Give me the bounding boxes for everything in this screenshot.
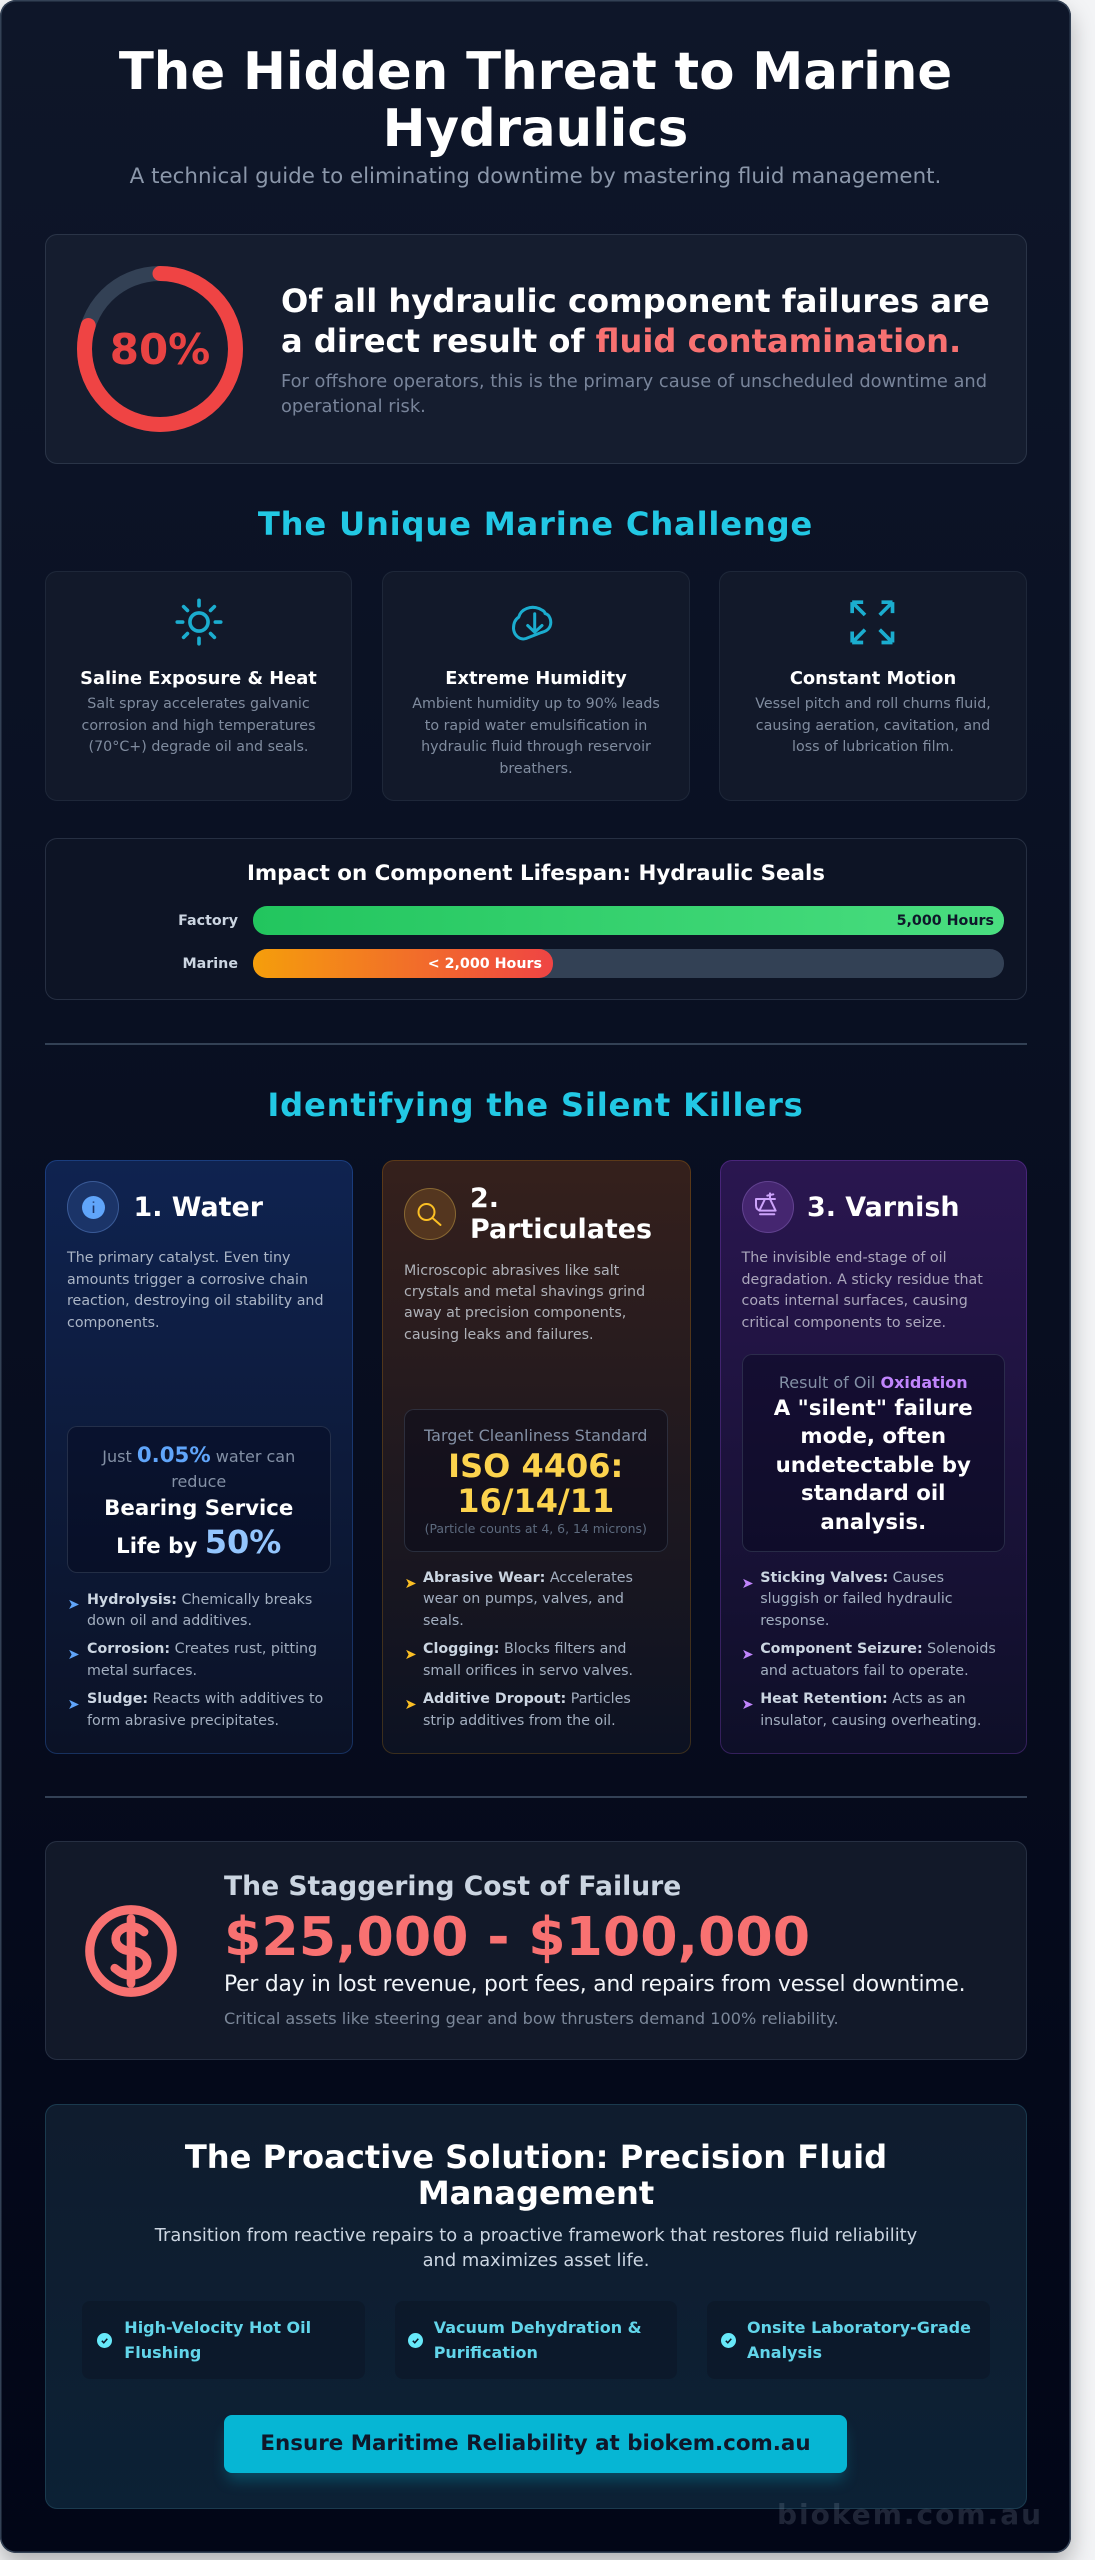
marine bar row	[182, 949, 1004, 978]
call to action button: Ensure Maritime Reliability at biokem.com.au	[260, 2431, 811, 2456]
icon: information circle	[67, 1181, 119, 1233]
callout value: 16/14/11	[457, 1482, 614, 1520]
solution heading: The Proactive Solution: Precision Fluid	[185, 2138, 887, 2176]
card text: (70°C+) degrade oil and seals.	[89, 739, 308, 755]
item: hydrolysis: Hydrolysis: Chemically breaks	[87, 1592, 312, 1608]
icon: dollar circle	[85, 1905, 177, 1997]
callout statement: undetectable by	[776, 1453, 971, 1478]
card text: The invisible end-stage of oil	[742, 1250, 947, 1266]
card text: Microscopic abrasives like salt	[404, 1263, 619, 1279]
card text: away at precision components,	[404, 1305, 626, 1321]
panel: proactive solution	[45, 2104, 1027, 2509]
arrow: ➤	[404, 1696, 417, 1712]
card text: breathers.	[499, 761, 573, 777]
statistic headline	[281, 282, 990, 360]
callout lead-in continued: reduce	[171, 1472, 226, 1490]
item: heat retention: Heat Retention: Acts as an	[760, 1691, 966, 1707]
icon: magnifier	[404, 1188, 456, 1240]
item: abrasive wear	[423, 1570, 633, 1629]
card text	[412, 696, 660, 777]
panel: constant motion	[719, 571, 1027, 801]
arrow: ➤	[742, 1696, 754, 1712]
card heading: 2.	[470, 1183, 499, 1214]
donut chart: 80%: 80%	[110, 325, 210, 374]
icon: check	[97, 2333, 112, 2348]
item: sludge: form abrasive precipitates.	[87, 1713, 279, 1729]
panel: particulates	[382, 1160, 690, 1754]
item text: Purification	[434, 2343, 538, 2362]
card text: Vessel pitch and roll churns fluid,	[755, 696, 991, 712]
card text: degradation. A sticky residue that	[742, 1272, 983, 1288]
item: heat retention	[760, 1691, 981, 1729]
cost description: Per day in lost revenue, port fees, and repairs from vessel downtime.	[224, 1972, 965, 1996]
callout statement: standard oil	[801, 1481, 945, 1506]
item: corrosion: Corrosion: Creates rust, pitting	[87, 1641, 317, 1657]
item: hydrolysis	[87, 1592, 312, 1629]
arrow: ➤	[404, 1646, 417, 1662]
item text: Flushing	[124, 2343, 201, 2362]
card heading: Particulates	[470, 1214, 652, 1245]
statistic note: operational risk.	[281, 396, 426, 417]
solution text: Transition from reactive repairs to a proactive framework that restores fluid reliability	[155, 2224, 917, 2246]
card text: components.	[67, 1315, 160, 1331]
donut chart: 80%	[77, 266, 243, 432]
cost note: Critical assets like steering gear and bow thrusters demand 100% reliability.	[224, 2009, 839, 2028]
card text: causing aeration, cavitation, and	[756, 718, 990, 734]
callout label: Result of Oil Oxidation	[779, 1372, 968, 1392]
callout label: Target Cleanliness Standard	[424, 1426, 647, 1445]
item text	[434, 2315, 642, 2365]
solution text	[154, 2224, 917, 2270]
item text: Onsite Laboratory-Grade	[747, 2318, 971, 2337]
panel: seal lifespan chart	[45, 838, 1027, 1000]
icon: sun	[175, 598, 222, 646]
item: component seizure	[760, 1641, 996, 1679]
callout value	[448, 1447, 623, 1520]
callout footnote: (Particle counts at 4, 6, 14 microns)	[425, 1520, 647, 1536]
bar track	[253, 949, 1004, 978]
card text: Ambient humidity up to 90% leads	[412, 696, 660, 712]
callout statement: analysis.	[820, 1510, 926, 1535]
value: 5,000 hours: 5,000 Hours	[897, 912, 994, 928]
callout: cleanliness standard	[404, 1408, 668, 1552]
panel: 80 percent statistic	[45, 234, 1027, 464]
callout: water content	[67, 1426, 330, 1573]
card text: loss of lubrication film.	[792, 739, 954, 755]
label: factory: Factory	[178, 912, 238, 928]
item text: Vacuum Dehydration &	[434, 2318, 642, 2337]
item: sludge	[87, 1691, 323, 1729]
call to action button	[224, 2415, 847, 2473]
card text: corrosion and high temperatures	[81, 718, 316, 734]
value: under 2,000 hours: < 2,000 Hours	[428, 956, 542, 972]
callout statistic: Life by 50%	[116, 1522, 281, 1560]
item: abrasive wear: seals.	[423, 1613, 464, 1629]
card text	[404, 1263, 645, 1343]
list: particulate effects	[404, 1570, 633, 1729]
card text: The primary catalyst. Even tiny	[67, 1250, 290, 1266]
card text: critical components to seize.	[742, 1315, 946, 1331]
card text: hydraulic fluid through reservoir	[421, 739, 651, 755]
card title: Saline Exposure & Heat	[80, 668, 317, 689]
card heading: 1. Water	[134, 1192, 263, 1222]
header	[119, 42, 952, 189]
arrow: ➤	[742, 1576, 754, 1592]
icon: cloud with arrow	[512, 606, 552, 640]
arrow: ➤	[742, 1646, 754, 1662]
solution heading	[185, 2138, 887, 2212]
item: corrosion: metal surfaces.	[87, 1663, 197, 1679]
title: The Hidden Threat to Marine	[119, 42, 952, 102]
card text: amounts trigger a corrosive chain	[67, 1272, 308, 1288]
statistic headline: Of all hydraulic component failures are	[281, 282, 990, 320]
item: additive dropout	[423, 1691, 631, 1729]
heading: marine challenge: The Unique Marine Challenge	[258, 505, 813, 543]
card text: causing leaks and failures.	[404, 1327, 594, 1343]
callout: oxidation	[742, 1354, 1005, 1552]
title	[119, 42, 952, 159]
watermark: biokem.com.au	[777, 2498, 1043, 2531]
list: water effects	[68, 1592, 323, 1729]
item: component seizure: Component Seizure: Solenoids	[760, 1641, 996, 1657]
item: hot oil flushing	[82, 2301, 364, 2379]
card text	[755, 696, 991, 755]
solution text: and maximizes asset life.	[423, 2250, 649, 2270]
item: clogging	[423, 1641, 633, 1679]
item: clogging: small orifices in servo valves.	[423, 1663, 633, 1679]
item: hydrolysis: down oil and additives.	[87, 1613, 252, 1629]
card text: to rapid water emulsification in	[425, 718, 647, 734]
label: marine: Marine	[182, 956, 238, 972]
item: abrasive wear: Abrasive Wear: Accelerates	[423, 1570, 633, 1586]
panel: water	[45, 1160, 352, 1754]
callout lead-in: Just 0.05% water can	[102, 1442, 295, 1468]
item: sludge: Sludge: Reacts with additives to	[87, 1691, 323, 1707]
cost heading: The Staggering Cost of Failure	[224, 1871, 681, 1902]
card text: coats internal surfaces, causing	[742, 1293, 968, 1309]
list: varnish effects	[742, 1570, 996, 1729]
arrow: ➤	[404, 1576, 417, 1592]
bar: 5,000 hours	[253, 906, 1004, 934]
icon: check	[408, 2333, 423, 2348]
item: laboratory analysis	[707, 2301, 990, 2379]
chart title: Impact on Component Lifespan: Hydraulic Seals	[247, 861, 825, 886]
card text	[66, 1250, 324, 1331]
callout statement	[774, 1396, 973, 1535]
subtitle: A technical guide to eliminating downtime by mastering fluid management.	[130, 164, 941, 189]
panel: saline exposure	[45, 571, 352, 801]
item: sticking valves: Sticking Valves: Causes	[760, 1570, 944, 1586]
panel: varnish	[720, 1160, 1027, 1754]
arrow: ➤	[68, 1646, 80, 1662]
statistic note: For offshore operators, this is the primary cause of unscheduled downtime and	[281, 371, 987, 392]
item: heat retention: insulator, causing overheating.	[760, 1713, 981, 1729]
factory bar row	[178, 906, 1004, 935]
card text	[741, 1250, 983, 1331]
icon: expanding arrows	[850, 600, 894, 644]
item: sticking valves: sluggish or failed hydraulic	[760, 1591, 953, 1607]
item: sticking valves: response.	[760, 1613, 829, 1629]
item text: Analysis	[747, 2343, 822, 2362]
statistic note	[281, 371, 987, 417]
cost figure: $25,000 - $100,000	[224, 1904, 810, 1968]
title: Hydraulics	[383, 99, 688, 159]
card heading: 3. Varnish	[807, 1192, 960, 1222]
arrow: ➤	[68, 1596, 80, 1612]
panel: cost of failure	[45, 1841, 1027, 2060]
item text	[124, 2318, 311, 2362]
item text	[747, 2315, 971, 2365]
solution heading: Management	[418, 2174, 654, 2212]
callout statement: Bearing Service	[104, 1496, 293, 1521]
item: vacuum dehydration	[394, 2301, 677, 2379]
callout value: ISO 4406:	[448, 1447, 623, 1485]
card title: Constant Motion	[790, 668, 956, 689]
item: corrosion	[87, 1641, 317, 1679]
icon: check	[720, 2333, 736, 2348]
item text: High-Velocity Hot Oil	[124, 2318, 311, 2337]
callout statement: A "silent" failure	[774, 1396, 973, 1421]
bar: under 2,000 hours	[253, 949, 553, 978]
card text	[81, 696, 316, 755]
item: component seizure: and actuators fail to operate.	[760, 1663, 969, 1679]
card text: crystals and metal shavings grind	[404, 1284, 645, 1300]
item: sticking valves	[760, 1570, 953, 1629]
card title: Extreme Humidity	[445, 668, 627, 689]
item: additive dropout: strip additives from the oil.	[423, 1713, 616, 1729]
icon: flask	[742, 1181, 794, 1233]
card text: reaction, destroying oil stability and	[67, 1293, 324, 1309]
statistic headline: a direct result of fluid contamination.	[281, 322, 961, 360]
panel: extreme humidity	[382, 571, 690, 801]
card text: Salt spray accelerates galvanic	[87, 696, 310, 712]
card heading	[470, 1183, 652, 1245]
callout statement: mode, often	[800, 1424, 946, 1449]
item: abrasive wear: wear on pumps, valves, and	[423, 1591, 624, 1607]
item: clogging: Clogging: Blocks filters and	[423, 1641, 626, 1657]
arrow: ➤	[68, 1696, 80, 1712]
heading: silent killers: Identifying the Silent Killers	[267, 1086, 804, 1124]
item: additive dropout: Additive Dropout: Particles	[423, 1691, 631, 1707]
